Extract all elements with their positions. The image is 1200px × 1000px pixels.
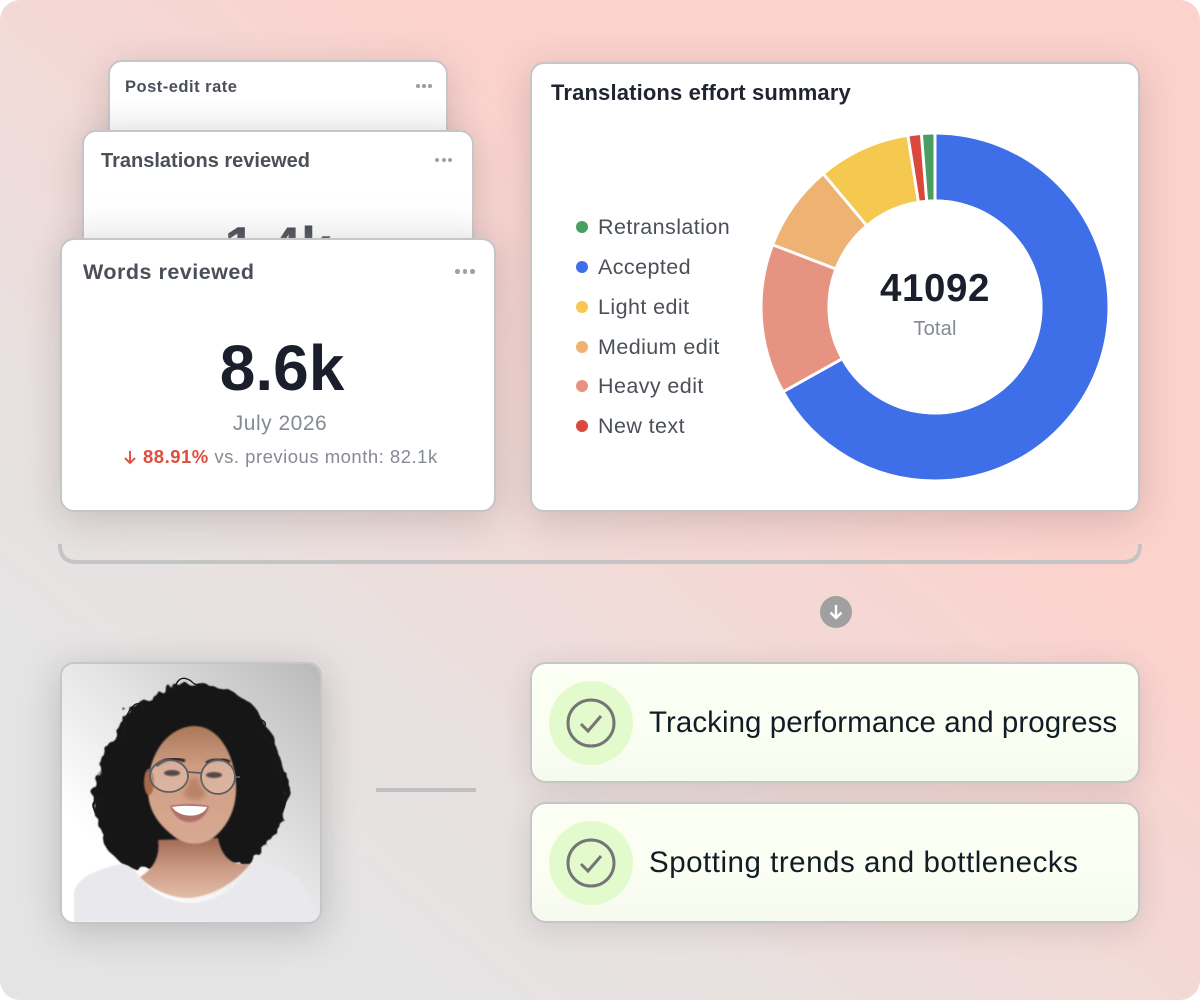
total value: 41092 — [880, 267, 990, 310]
portrait photo — [60, 662, 322, 924]
eyes — [164, 770, 180, 776]
ear — [144, 769, 154, 795]
legend: effort categories — [576, 215, 730, 438]
donut total — [880, 267, 990, 340]
panel: translations effort summary — [530, 62, 1140, 512]
heading: post-edit rate: Post-edit rate — [125, 78, 237, 96]
icon: menu dots — [455, 269, 475, 274]
smile — [170, 804, 209, 822]
icon: check badge — [549, 821, 633, 905]
illustration: woman with curly hair — [62, 664, 320, 922]
legend item: medium edit: Medium edit — [598, 335, 720, 359]
metric: words value: 8.6k — [220, 332, 344, 404]
glasses — [147, 760, 240, 794]
legend item: accepted: Accepted — [598, 255, 691, 279]
heading: words reviewed: Words reviewed — [83, 260, 254, 284]
icon: check badge — [549, 681, 633, 765]
benefit text: Spotting trends and bottlenecks — [649, 846, 1078, 879]
legend item: heavy edit: Heavy edit — [598, 374, 704, 398]
heading: effort summary: Translations effort summary — [551, 80, 851, 105]
card: post-edit rate — [108, 60, 448, 170]
total label: Total — [913, 318, 957, 340]
benefit: tracking performance — [530, 662, 1140, 783]
connector line — [376, 788, 476, 792]
legend item: light edit: Light edit — [598, 295, 689, 319]
icon: menu dots — [416, 84, 432, 88]
benefit: spotting trends — [530, 802, 1140, 923]
hair — [93, 684, 287, 867]
loose curls — [93, 678, 286, 815]
donut chart — [762, 134, 1108, 480]
icon: down arrow — [820, 596, 852, 628]
bracket — [58, 544, 1142, 564]
neck and chest — [140, 838, 250, 898]
comparison line: 88.91% vs. previous month: 82.1k — [143, 446, 438, 467]
t-shirt — [74, 860, 318, 922]
heading: translations reviewed: Translations reviewed — [101, 150, 310, 172]
nose — [184, 778, 205, 800]
legend item: retranslation: Retranslation — [598, 215, 730, 239]
legend item: new text: New text — [598, 414, 685, 438]
date label: July 2026 — [233, 412, 327, 435]
benefit text: Tracking performance and progress — [649, 706, 1117, 739]
eyebrows — [156, 759, 185, 766]
card: translations reviewed — [82, 130, 474, 280]
card: words reviewed — [60, 238, 496, 512]
metric: translations value: 1.4k — [224, 215, 332, 277]
face — [148, 726, 236, 844]
icon: menu dots — [435, 158, 452, 162]
